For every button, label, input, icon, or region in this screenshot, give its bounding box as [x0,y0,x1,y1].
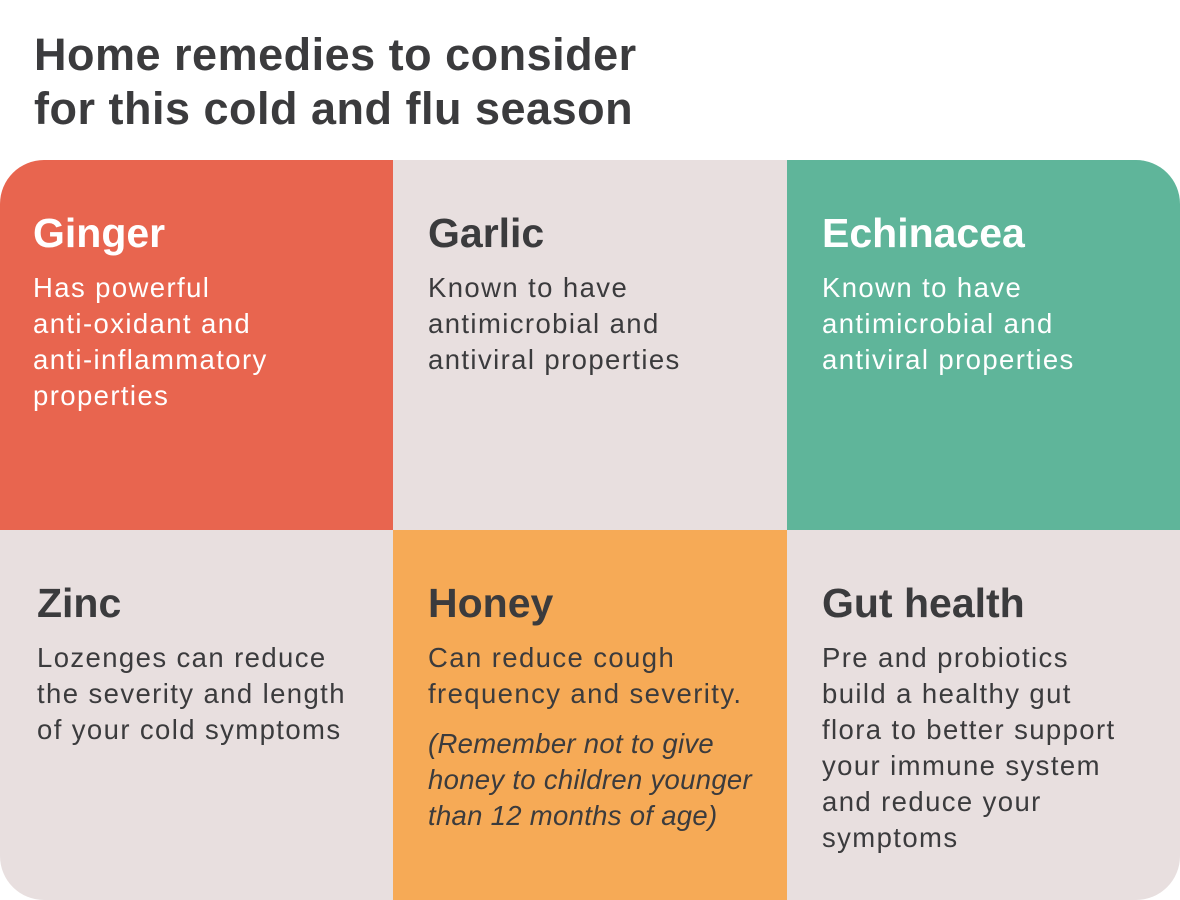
panel: zinc: Lozenges can reduce [37,642,327,673]
panel: zinc [0,530,394,900]
panel: ginger: Has powerful [33,272,210,303]
panel: gut health: build a healthy gut [822,678,1072,709]
panel: honey [393,530,787,900]
panel: echinacea: Echinacea [822,210,1025,256]
panel: garlic: Known to have [428,272,628,303]
panel: honey: than 12 months of age) [428,800,717,831]
panel: garlic: Garlic [428,210,544,256]
panel: gut health: symptoms [822,822,958,853]
panel: gut health: Gut health [822,580,1025,626]
panel: ginger: properties [33,380,169,411]
panel: echinacea: Known to have [822,272,1022,303]
panel: echinacea [787,160,1180,530]
panel: garlic [393,160,787,530]
panel: honey: Can reduce cough [428,642,675,673]
panel: gut health: your immune system [822,750,1101,781]
panel: honey: honey to children younger [428,764,752,795]
panel: ginger: anti-inflammatory [33,344,268,375]
panel: garlic: antimicrobial and [428,308,660,339]
panel: gut health: flora to better support [822,714,1116,745]
panel: zinc: of your cold symptoms [37,714,342,745]
panel: honey: Honey [428,580,553,626]
panel: honey: frequency and severity. [428,678,742,709]
panel: echinacea: antimicrobial and [822,308,1054,339]
panel: echinacea: antiviral properties [822,344,1075,375]
panel: zinc: the severity and length [37,678,346,709]
panel: ginger: Ginger [33,210,165,256]
panel: zinc: Zinc [37,580,121,626]
title: for this cold and flu season [34,83,633,134]
panel: gut health: and reduce your [822,786,1042,817]
title: Home remedies to consider [34,29,637,80]
title [34,29,637,134]
panel: ginger: anti-oxidant and [33,308,251,339]
panel: honey: (Remember not to give [428,728,714,759]
panel: garlic: antiviral properties [428,344,681,375]
panel: ginger [0,160,394,530]
panel: gut health: Pre and probiotics [822,642,1069,673]
panel: gut health [787,530,1180,900]
